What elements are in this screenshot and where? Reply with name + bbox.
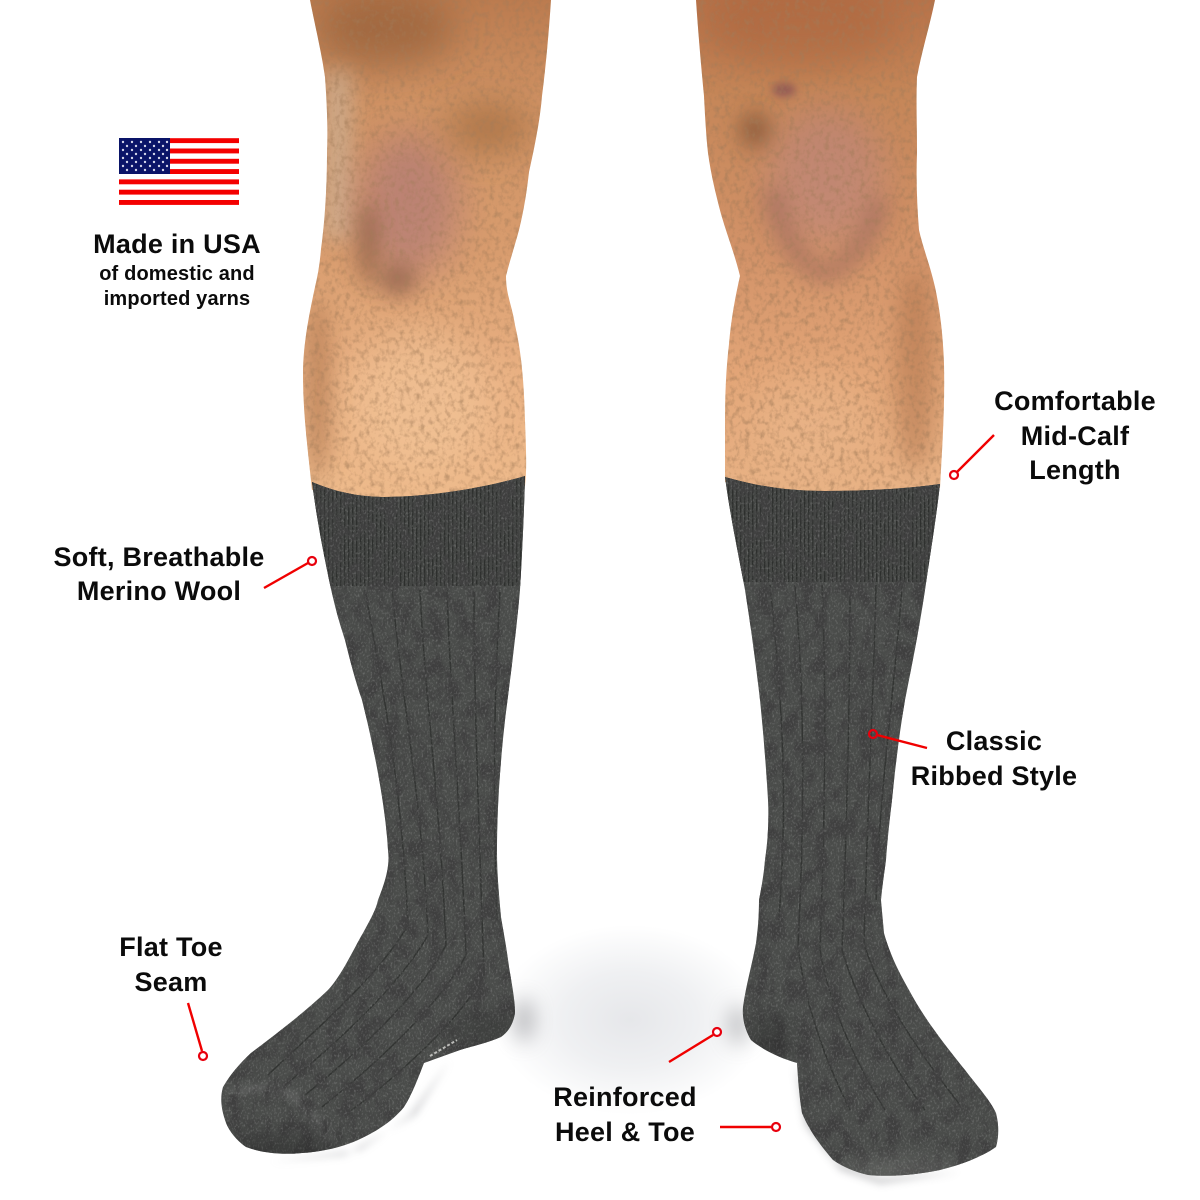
callout: Soft, Breathable Merino Wool: Merino Wool xyxy=(77,576,241,606)
left calf shading xyxy=(304,300,332,480)
callout: Reinforced Heel & Toe: Heel & Toe xyxy=(555,1117,695,1147)
callout: Flat Toe Seam: Flat Toe xyxy=(119,932,223,962)
left toe seam xyxy=(228,1088,330,1140)
icon: American flag xyxy=(119,138,239,205)
callout: Reinforced Heel & Toe: Reinforced xyxy=(553,1082,697,1112)
callout: Classic Ribbed Style: Ribbed Style xyxy=(911,761,1077,791)
callout: Classic Ribbed Style xyxy=(869,726,1077,791)
left cuff ribbing xyxy=(312,476,525,586)
left sock logo mark xyxy=(430,1040,457,1056)
right cuff ribbing xyxy=(725,477,940,582)
left foot ribs xyxy=(268,925,484,1115)
left leg xyxy=(295,0,560,505)
callout: Comfortable Mid-Calf Length: Comfortable xyxy=(994,386,1156,416)
left leg hair texture xyxy=(295,0,560,505)
callout: Comfortable Mid-Calf Length: Length xyxy=(1029,455,1121,485)
callout: Flat Toe Seam: Seam xyxy=(134,967,208,997)
callout: Flat Toe Seam xyxy=(119,932,223,1060)
floor shadow xyxy=(270,925,960,1184)
callout: Classic Ribbed Style: Classic xyxy=(946,726,1042,756)
callout: Soft, Breathable Merino Wool: Soft, Breathable xyxy=(53,542,265,572)
callout: Soft, Breathable Merino Wool xyxy=(53,542,316,606)
right sock xyxy=(720,470,1010,1180)
left kneecap xyxy=(358,133,458,277)
bruise on right knee xyxy=(772,83,796,97)
callout: Comfortable Mid-Calf Length: Mid-Calf xyxy=(1021,421,1130,451)
right leg hair texture xyxy=(690,0,950,505)
pale patch on left knee xyxy=(324,70,352,240)
left sock xyxy=(210,470,530,1170)
left thigh shading xyxy=(315,0,455,68)
right kneecap xyxy=(768,107,884,243)
right leg ribs xyxy=(770,585,902,950)
text: Made in USA xyxy=(93,229,261,310)
left leg ribs xyxy=(365,590,500,975)
right leg xyxy=(690,0,950,505)
text: Made in USA: Made in USA xyxy=(93,229,261,259)
text: Made in USA: of domestic and xyxy=(99,263,255,285)
right foot ribs xyxy=(798,945,960,1110)
callout: Comfortable Mid-Calf Length xyxy=(950,386,1156,485)
callout: Reinforced Heel & Toe xyxy=(553,1028,780,1147)
text: Made in USA: imported yarns xyxy=(104,288,250,310)
